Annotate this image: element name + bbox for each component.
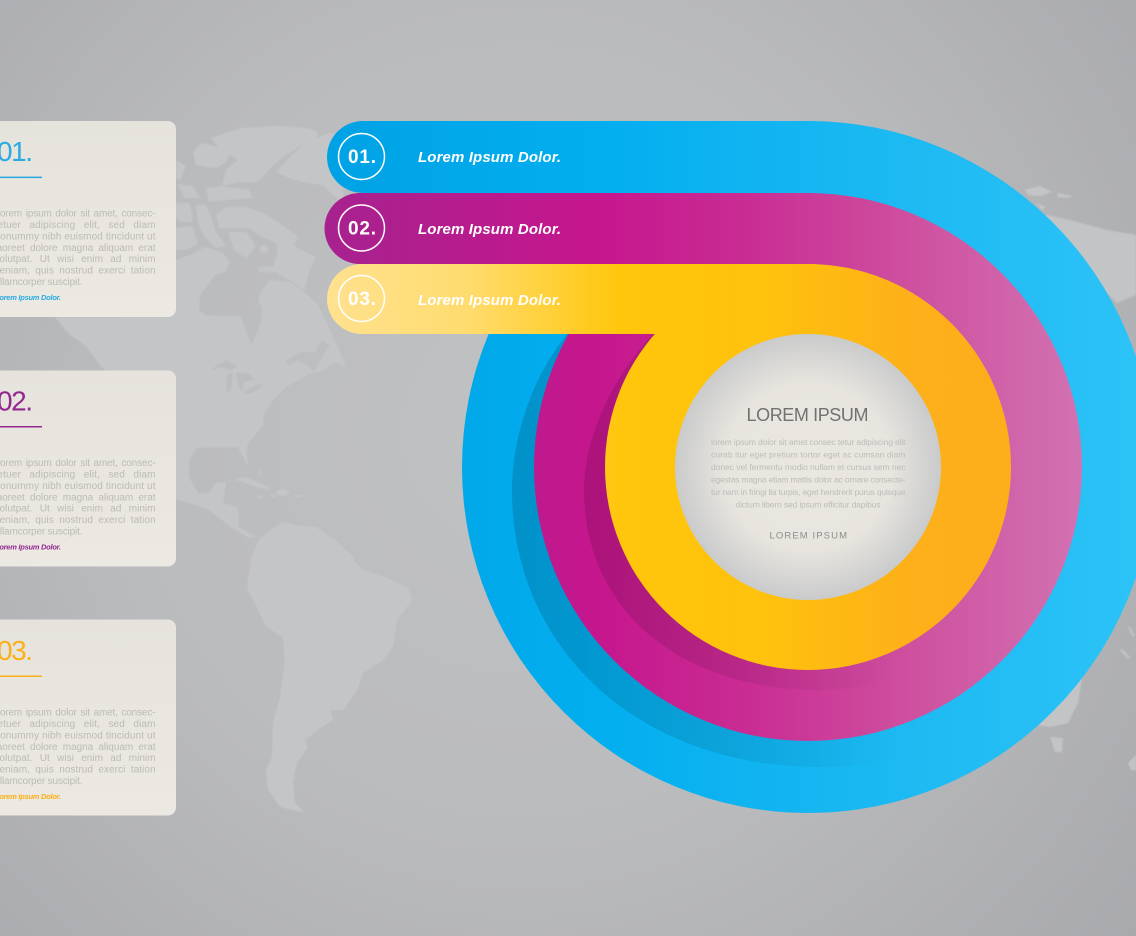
panel: detail card 02	[0, 370, 176, 566]
magenta band inner shadow	[584, 334, 900, 690]
map: North America mainland	[170, 247, 346, 538]
map: arctic islands	[176, 126, 343, 290]
map: South America	[247, 522, 412, 813]
map: Alaska fragment	[55, 317, 176, 375]
map: Asia fragment	[1000, 186, 1136, 303]
centre caption: LOREM IPSUM	[770, 530, 847, 542]
card 03 body text	[0, 708, 156, 787]
card 01 body text	[0, 208, 156, 288]
centre body text: curab itur eget pretium tortor eget ac cumsan diam	[711, 450, 906, 460]
blue band inner shadow	[512, 334, 900, 767]
ring: yellow band 03	[327, 264, 1011, 670]
centre title: LOREM IPSUM	[746, 405, 868, 425]
bar label 01	[338, 134, 561, 180]
centre body text: dictum libero sed ipsum efficitur dapibus	[736, 500, 880, 510]
map: Caribbean islands	[234, 468, 302, 498]
centre body text	[711, 437, 906, 510]
world map	[55, 126, 1136, 813]
bar label 03	[338, 276, 561, 322]
centre circle	[675, 334, 941, 600]
bar label 01: 01.	[348, 147, 376, 168]
panel: detail card 03	[0, 620, 176, 816]
centre body text: tur nam in fringi lla turpis, eget hendrerit purus quisque	[711, 487, 906, 497]
centre body text: lorem ipsum dolor sit amet consec tetur adipiscing elit	[711, 437, 906, 447]
bar label 03: Lorem Ipsum Dolor.	[418, 292, 561, 309]
bar label 03: 03.	[348, 289, 376, 310]
map: Australia and islands	[1000, 627, 1136, 770]
bar label 02: Lorem Ipsum Dolor.	[418, 221, 561, 238]
ring: magenta band 02	[324, 193, 1082, 741]
bar label 02: 02.	[348, 218, 376, 240]
panel: detail card 01	[0, 121, 176, 317]
ring: blue band 01	[327, 121, 1136, 813]
bar label 01: Lorem Ipsum Dolor.	[418, 149, 561, 166]
bar label 02	[338, 205, 561, 251]
centre body text: donec vel fermentu modio nullam et cursus sem nec	[711, 462, 906, 472]
card 02 body text	[0, 458, 156, 538]
centre body text: egestas magna etiam mattis dolor ac ornare consecte-	[711, 474, 906, 484]
